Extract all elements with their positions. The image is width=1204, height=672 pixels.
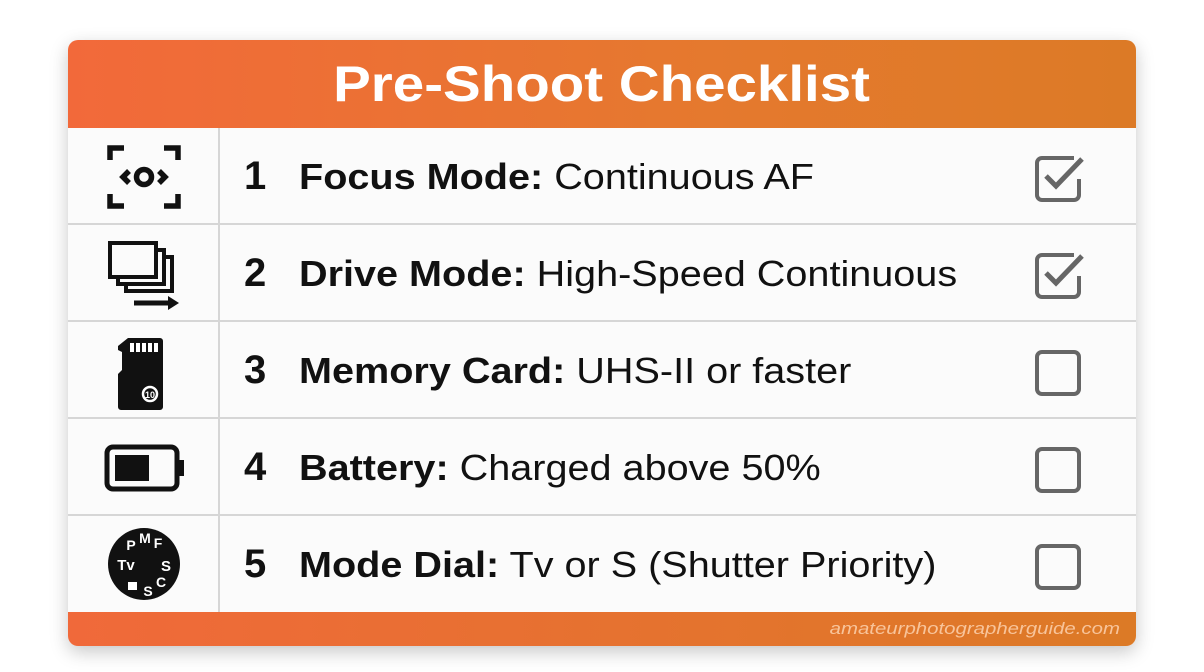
card (68, 40, 1136, 646)
checkbox checked (1035, 156, 1084, 202)
checkbox empty (1035, 350, 1081, 396)
label: Memory Card: UHS-II or faster (299, 350, 851, 391)
icon: sd card (68, 322, 220, 417)
label: Battery: Charged above 50% (299, 447, 821, 488)
label: Focus Mode: Continuous AF (299, 156, 814, 197)
row 1: focus mode (68, 128, 1136, 225)
row 2: drive mode (68, 225, 1136, 322)
title: Pre-Shoot Checklist (334, 56, 870, 112)
number: 5 (244, 542, 266, 586)
icon: mode dial: Tv (117, 557, 135, 574)
label: Drive Mode: High-Speed Continuous (299, 253, 957, 294)
icon: battery (68, 419, 220, 514)
icon: mode dial: S (161, 558, 171, 575)
number: 3 (244, 348, 266, 392)
checkbox empty (1035, 544, 1081, 590)
number: 1 (244, 154, 266, 198)
number: 2 (244, 251, 266, 295)
icon: mode dial (68, 516, 220, 612)
row 3: memory card (68, 322, 1136, 419)
row 4: battery (68, 419, 1136, 516)
checkbox checked (1035, 253, 1084, 299)
icon: mode dial: C (156, 574, 166, 590)
icon: mode dial: P (126, 537, 136, 553)
icon: mode dial: F (154, 535, 163, 551)
title (68, 40, 1136, 128)
icon: mode dial: M (139, 530, 151, 546)
icon: mode dial: S (143, 583, 153, 599)
row 5: mode dial (68, 516, 1136, 612)
icon: drive (68, 225, 220, 320)
number: 4 (244, 445, 266, 489)
label: Mode Dial: Tv or S (Shutter Priority) (299, 544, 936, 585)
icon: sd card: 10 (145, 390, 155, 400)
icon: focus (68, 128, 220, 223)
checkbox empty (1035, 447, 1081, 493)
footer credit (68, 612, 1136, 646)
footer credit: amateurphotographerguide.com (830, 619, 1120, 638)
